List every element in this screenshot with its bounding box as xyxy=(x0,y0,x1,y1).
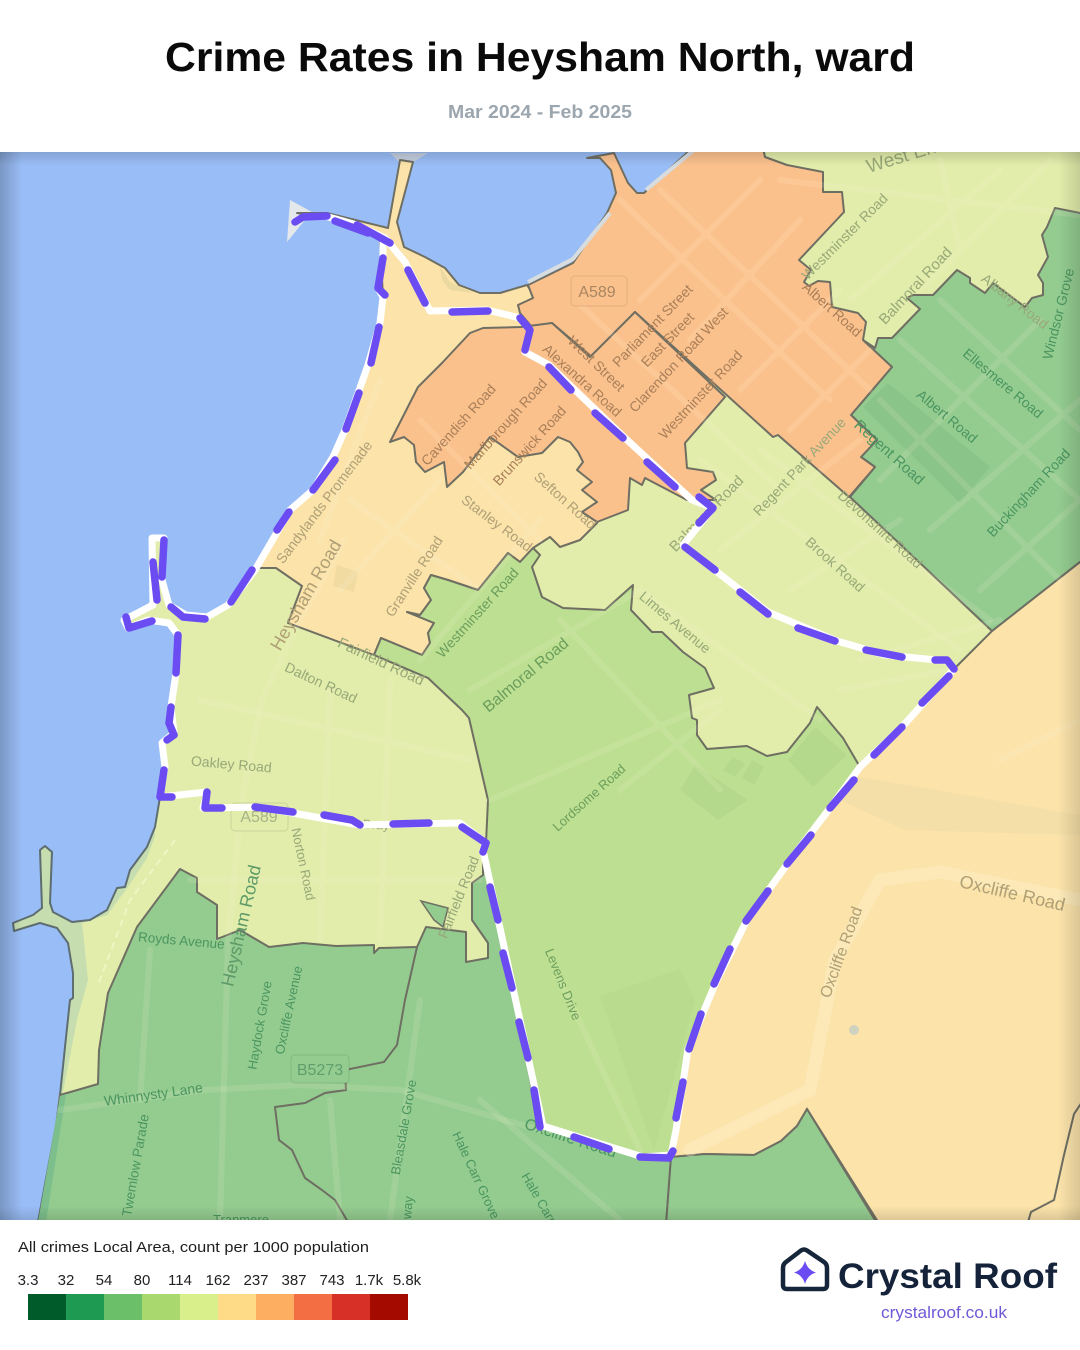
street name labels: Cavendish Road xyxy=(418,381,499,468)
region: tan Sandylands area xyxy=(257,160,600,655)
coast outline south-west xyxy=(13,797,160,1222)
legend tick values: 5.8k xyxy=(393,1272,422,1289)
logo wordmark: Crystal Roof xyxy=(838,1257,1057,1296)
ward boundary: white casing xyxy=(124,216,954,1157)
street name labels: Westminster Road xyxy=(798,190,891,283)
south green internal boundary xyxy=(275,947,417,1222)
street name labels: Oxcliffe Road xyxy=(522,1116,619,1162)
road shield: A589 north xyxy=(571,276,627,306)
beach shading near harbour xyxy=(440,267,473,293)
street name labels: way xyxy=(399,1195,416,1221)
street name labels xyxy=(103,134,1077,1227)
street name labels: Albert Road xyxy=(800,279,865,340)
school site in Sandylands xyxy=(333,565,358,592)
street name labels: Tranmere xyxy=(213,1212,269,1227)
region: orange south xyxy=(390,312,725,522)
sea background xyxy=(0,152,686,1220)
street name labels: Dalton Road xyxy=(282,659,360,706)
road shield: A589 south: A589 xyxy=(240,809,278,826)
legend tick values: 237 xyxy=(243,1272,269,1289)
darker shore edge at south-west xyxy=(38,1094,66,1222)
street name labels: Balmoral Road xyxy=(666,472,747,555)
street name labels: Fairfield Road xyxy=(435,854,482,941)
street name labels: Twemlow Parade xyxy=(119,1113,152,1218)
street name labels: Oxcliffe Road xyxy=(958,871,1067,915)
street name labels: Sandylands Promenade xyxy=(273,437,375,566)
street name labels: Whinnysty Lane xyxy=(103,1079,204,1109)
street name labels: Heysham Road xyxy=(217,863,265,988)
street name labels: Westminster Road xyxy=(433,565,522,661)
school grounds block xyxy=(863,383,990,503)
street name labels: Regent Park Avenue xyxy=(750,414,849,519)
road shield: A589 south xyxy=(231,803,288,831)
subtitle: date range: Mar 2024 - Feb 2025 xyxy=(448,102,632,122)
street name labels: West Street xyxy=(565,332,628,395)
street name labels: Bleasdale Grove xyxy=(388,1079,419,1176)
street name labels: Fairfield Road xyxy=(335,634,427,689)
street name labels: Brunswick Road xyxy=(489,403,569,489)
legend tick values: 162 xyxy=(205,1272,231,1289)
street name labels: Oxcliffe Avenue xyxy=(272,965,305,1056)
region: mid green central area xyxy=(374,548,860,1158)
coastal path dashes xyxy=(98,840,175,985)
street name labels: Granville Road xyxy=(382,533,446,619)
legend tick values: 743 xyxy=(319,1272,345,1289)
website url: crystalroof.co.uk xyxy=(881,1304,1008,1322)
street name labels: Balmoral Road xyxy=(480,635,572,716)
vignette edges xyxy=(0,152,1080,1220)
region: tan east area xyxy=(671,558,1080,1225)
street name labels: Marlborough Road xyxy=(461,375,550,472)
street name labels: Levens Drive xyxy=(542,946,584,1022)
legend tick values: 3.3 xyxy=(18,1272,38,1289)
street name labels: Hale Carr Grove xyxy=(449,1129,503,1221)
road shield: A589 north: A589 xyxy=(578,284,616,301)
street name labels: East Street xyxy=(638,309,697,370)
street name labels: Albany Road xyxy=(979,270,1052,332)
street label: West End: West End xyxy=(864,134,949,178)
street name labels: Clarendon Road West xyxy=(626,304,731,415)
street name labels: Stanley Road xyxy=(459,491,535,555)
bright grey shore edge strips xyxy=(528,150,694,282)
legend tick values: 114 xyxy=(168,1272,192,1289)
region: dark green south xyxy=(38,852,671,1225)
street name labels: Bray xyxy=(363,817,390,832)
street name labels: Devonshire Road xyxy=(835,487,926,571)
street name labels: Windsor Grove xyxy=(1039,266,1077,361)
street name labels: Hale Carr xyxy=(518,1170,560,1226)
street name labels: Albert Road xyxy=(914,386,981,446)
street name labels: Alexandra Road xyxy=(540,341,625,420)
legend tick values: 387 xyxy=(281,1272,307,1289)
street name labels: Royds Avenue xyxy=(137,929,225,952)
sports pitches xyxy=(688,764,764,818)
legend tick values: 80 xyxy=(134,1272,150,1289)
street network overlay xyxy=(60,160,1080,1220)
land base: yellow-green crime band xyxy=(62,152,1080,1094)
street name labels: Ellesmere Road xyxy=(960,345,1047,421)
legend title: All crimes Local Area, count per 1000 population xyxy=(18,1239,369,1256)
region: dark green north-east xyxy=(850,208,1080,631)
street name labels: Norton Road xyxy=(288,826,318,902)
street name labels: Brook Road xyxy=(803,534,868,595)
street name labels: Limes Avenue xyxy=(636,588,714,657)
street name labels: Parliament Street xyxy=(609,281,696,370)
road shield: B5273: B5273 xyxy=(297,1062,343,1079)
title: Crime Rates in Heysham North, ward xyxy=(165,34,915,80)
street name labels: Haydock Grove xyxy=(244,980,275,1071)
logo: house icon with star xyxy=(783,1250,827,1289)
street name labels: Buckingham Road xyxy=(983,445,1073,540)
south-east corner boundary xyxy=(1028,1102,1080,1222)
small grey icon: Oxcliffe landmark xyxy=(849,1025,859,1035)
street name labels: Heysham Road xyxy=(266,536,345,654)
legend tick values: 32 xyxy=(58,1272,74,1289)
beach strip and piers xyxy=(13,827,155,1095)
grey breakwater shapes xyxy=(287,153,428,242)
region: orange north xyxy=(518,148,892,497)
street name labels: Balmoral Road xyxy=(876,244,956,328)
street name labels: Sefton Road xyxy=(531,468,600,532)
street name labels: Lordsome Road xyxy=(550,761,628,834)
legend colour scale xyxy=(28,1294,408,1320)
small green sliver xyxy=(421,901,448,927)
legend tick values xyxy=(18,1272,422,1289)
road shield: B5273 xyxy=(291,1055,349,1083)
legend tick values: 1.7k xyxy=(355,1272,384,1289)
ward boundary: purple dashes xyxy=(126,216,954,1158)
legend tick values: 54 xyxy=(96,1272,112,1289)
railway band xyxy=(840,777,1080,835)
region: dark green south-east xyxy=(666,1109,878,1225)
street name labels: Oxcliffe Road xyxy=(817,905,866,1000)
street name labels: Westminster Road xyxy=(655,347,745,442)
street name labels: Regent Road xyxy=(850,417,928,489)
street name labels: Oakley Road xyxy=(190,753,272,776)
